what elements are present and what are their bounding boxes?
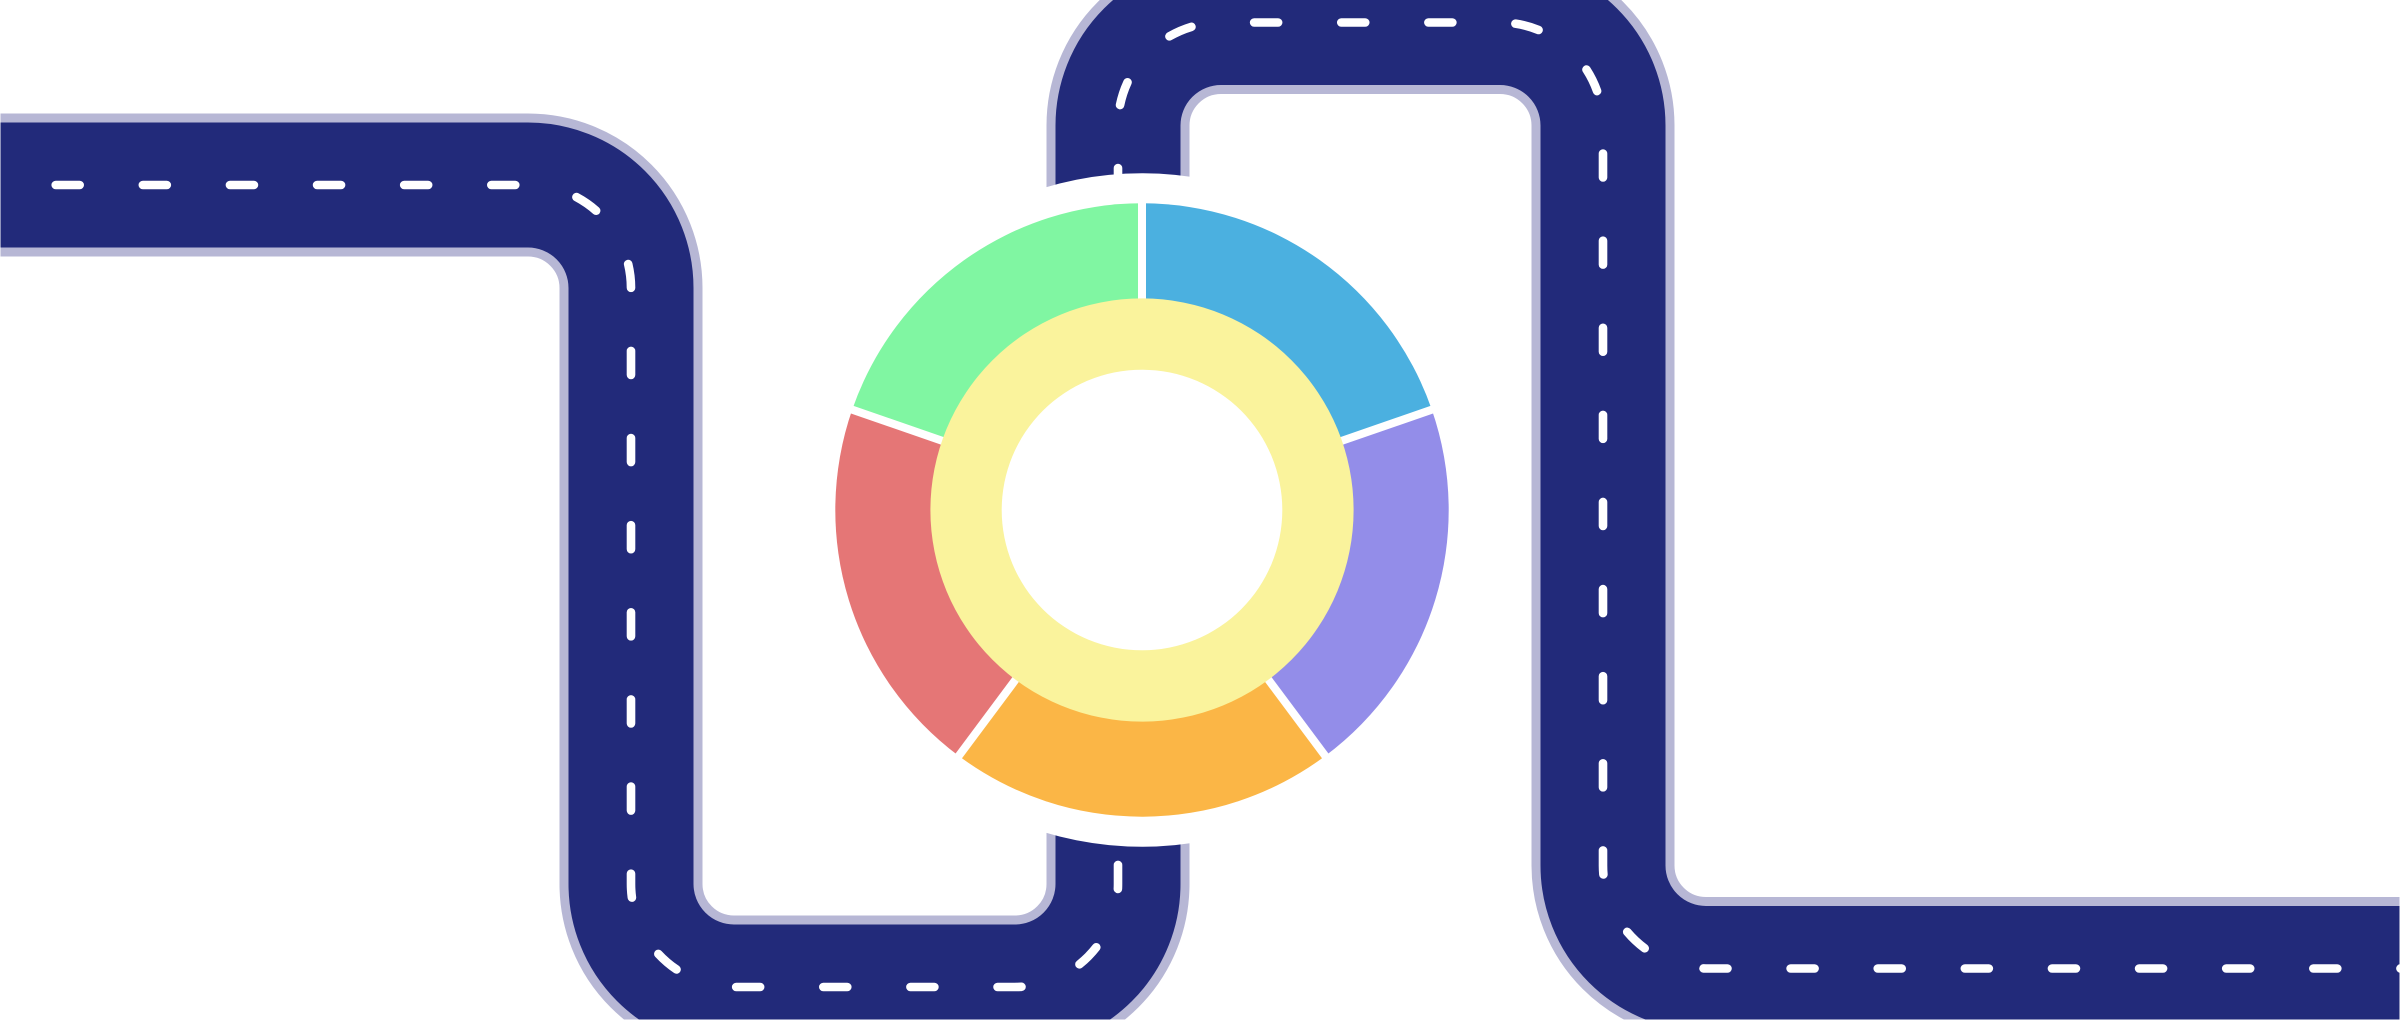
segment: green	[852, 203, 1142, 510]
white backing disc	[805, 173, 1479, 847]
donut chart	[805, 173, 1479, 847]
segment: purple	[1142, 410, 1449, 756]
donut centre hole	[1002, 370, 1282, 650]
inner yellow ring	[930, 298, 1354, 722]
segment: red	[835, 410, 1142, 756]
segment: blue	[1142, 203, 1432, 510]
segment: orange	[959, 510, 1325, 817]
